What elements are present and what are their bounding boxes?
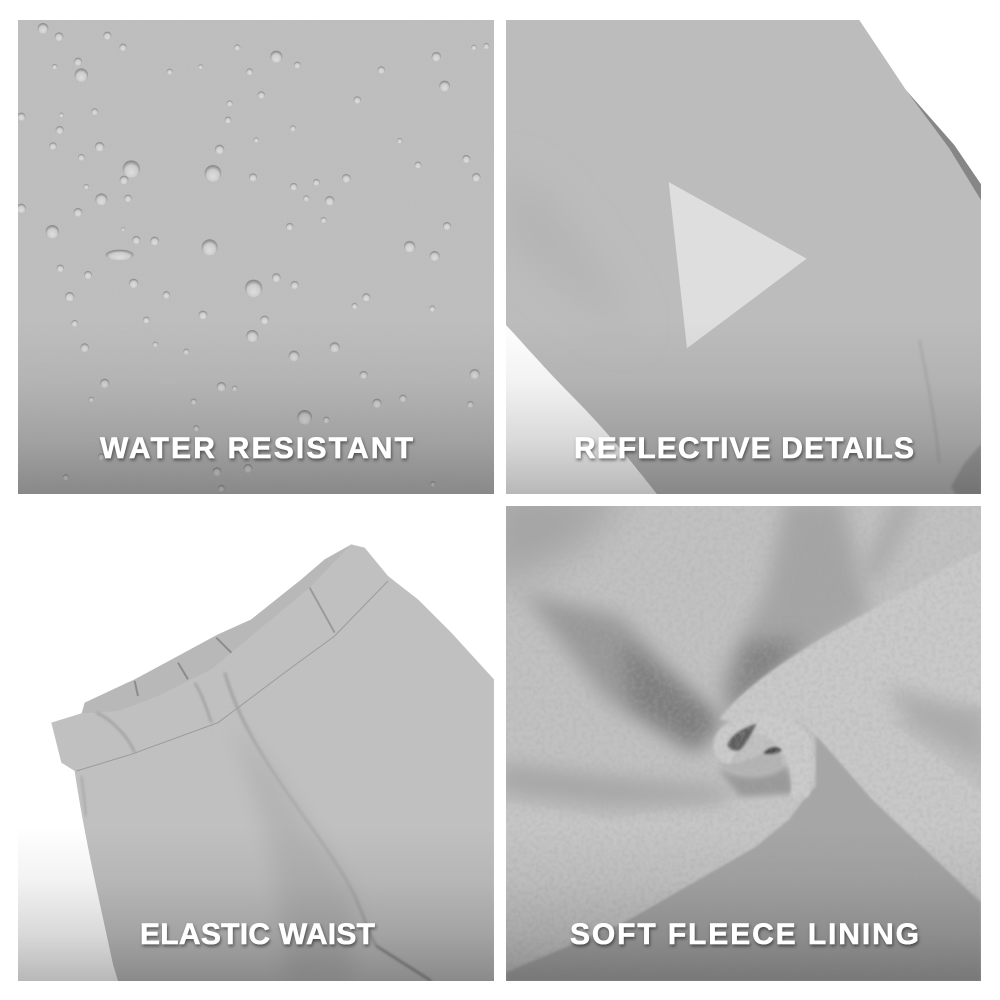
- right band shadow: [890, 687, 981, 762]
- panel: water resistant: [17, 20, 494, 494]
- label: soft fleece lining: SOFT FLEECE LINING: [570, 918, 919, 951]
- dark hole: [727, 723, 757, 751]
- lower right dark sector: [506, 733, 981, 981]
- sleeve back edge: [906, 90, 981, 200]
- upper right fold: [720, 602, 892, 721]
- dark wedge upper left: [523, 593, 719, 753]
- panel: elastic waist: [18, 506, 494, 981]
- label: reflective details: REFLECTIVE DETAILS: [574, 432, 914, 465]
- outer roll: [713, 716, 814, 799]
- water droplets: [17, 23, 489, 492]
- sleeve: [506, 20, 982, 495]
- dark crease: [763, 747, 782, 754]
- panel: soft fleece lining: [486, 486, 988, 981]
- reflective triangle: [669, 182, 807, 348]
- stitch line: [76, 581, 388, 771]
- top right slash: [866, 506, 916, 578]
- cuff seam: [919, 340, 939, 463]
- cuff gathers: [951, 443, 982, 495]
- corner shading: [506, 506, 622, 590]
- lower left fold: [632, 800, 804, 916]
- pants body: [51, 544, 494, 981]
- label: elastic waist: ELASTIC WAIST: [140, 918, 375, 951]
- left fold shadow: [499, 763, 733, 806]
- panel: reflective details: [506, 20, 983, 495]
- dark wedge top: [719, 499, 869, 713]
- lower roll: [726, 754, 782, 772]
- inner back waistband: [81, 544, 351, 719]
- right flap edge: [310, 588, 335, 633]
- seam shading: [252, 762, 350, 970]
- sleeve shading: [506, 170, 633, 337]
- centre seam: [225, 673, 376, 946]
- label: water resistant: WATER RESISTANT: [100, 432, 413, 465]
- pocket edge: [81, 776, 86, 816]
- shadow under roll: [717, 765, 797, 797]
- swirl centre: [713, 716, 814, 799]
- leg inner line: [376, 946, 431, 981]
- gathers: [96, 683, 211, 753]
- lower right fold: [815, 732, 898, 822]
